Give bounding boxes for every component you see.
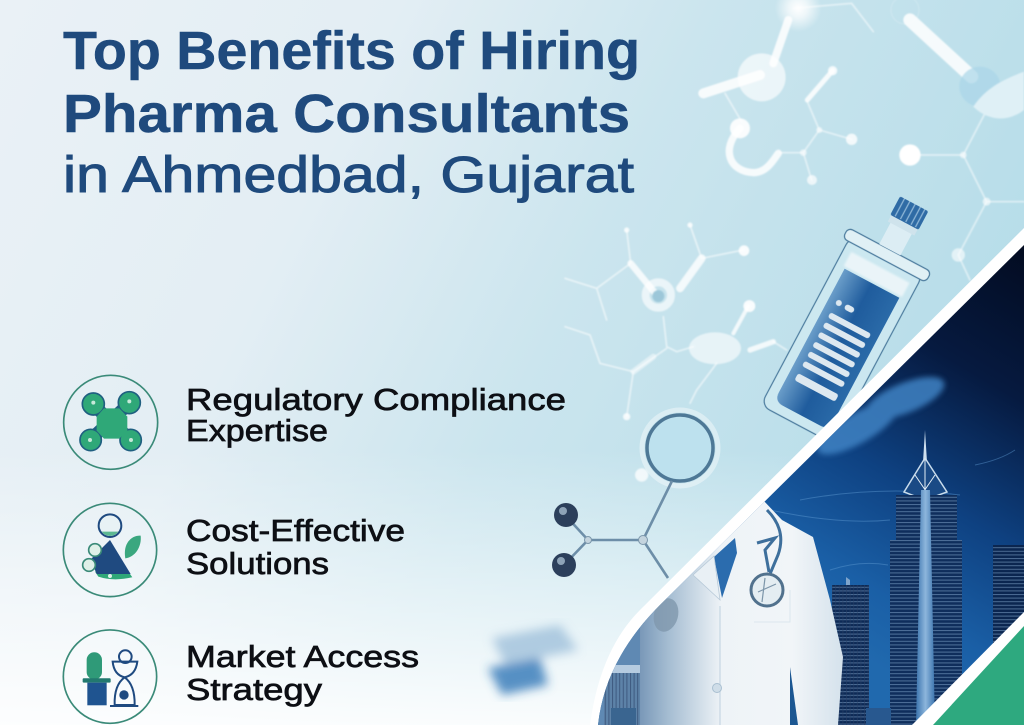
bottle glass body xyxy=(761,236,923,444)
benefit: market access strategy xyxy=(186,639,419,707)
pocket xyxy=(754,590,790,622)
left backdrop xyxy=(598,620,646,725)
bottle liquid xyxy=(774,269,899,430)
bottle label stripes xyxy=(795,300,871,402)
title xyxy=(63,21,640,203)
benefit: cost-effective solutions: Solutions xyxy=(186,546,329,581)
benefit: cost-effective solutions xyxy=(186,513,405,581)
stethoscope xyxy=(757,510,781,574)
right tower xyxy=(993,545,1024,644)
hand xyxy=(654,598,678,632)
icon: cost scale and leaf xyxy=(63,503,157,597)
magnifier and dark molecule xyxy=(552,410,718,578)
doctor coat xyxy=(640,500,843,725)
molecule spheres xyxy=(554,503,578,527)
title: in Ahmedbad, Gujarat xyxy=(63,146,634,203)
molecule bonds xyxy=(564,481,672,578)
bottle xyxy=(763,196,930,436)
bottle cap xyxy=(890,196,928,230)
panel: city and doctor xyxy=(590,240,1024,725)
sky streaks xyxy=(770,450,1015,570)
bottle neck xyxy=(879,223,912,256)
bottle lip xyxy=(843,228,931,282)
title: Top Benefits of Hiring xyxy=(63,21,640,81)
molecules: top decorative network xyxy=(703,0,1024,280)
white diagonal band xyxy=(590,228,1024,725)
button xyxy=(712,684,722,692)
title: Pharma Consultants xyxy=(63,84,630,144)
benefit: cost-effective solutions: Cost-Effective xyxy=(186,513,405,548)
benefit: regulatory compliance: Expertise xyxy=(186,413,328,448)
benefit: market access strategy: Strategy xyxy=(186,672,323,707)
small building xyxy=(866,708,891,725)
blurred pill xyxy=(488,625,578,695)
icon: market capsule and hourglass xyxy=(63,630,157,723)
shirt and tie xyxy=(714,538,737,598)
panel: green corner xyxy=(912,612,1024,725)
main tower xyxy=(890,430,962,725)
benefit: regulatory compliance: Regulatory Compliance xyxy=(186,382,566,417)
magnifier lens xyxy=(642,410,718,486)
benefit: market access strategy: Market Access xyxy=(186,639,419,674)
molecules: middle decorative network xyxy=(565,222,787,482)
icon: molecule xyxy=(64,375,158,469)
sleeve gap xyxy=(790,667,798,725)
left tower xyxy=(832,577,869,725)
benefit: regulatory compliance xyxy=(186,382,566,448)
cloud xyxy=(816,374,948,457)
